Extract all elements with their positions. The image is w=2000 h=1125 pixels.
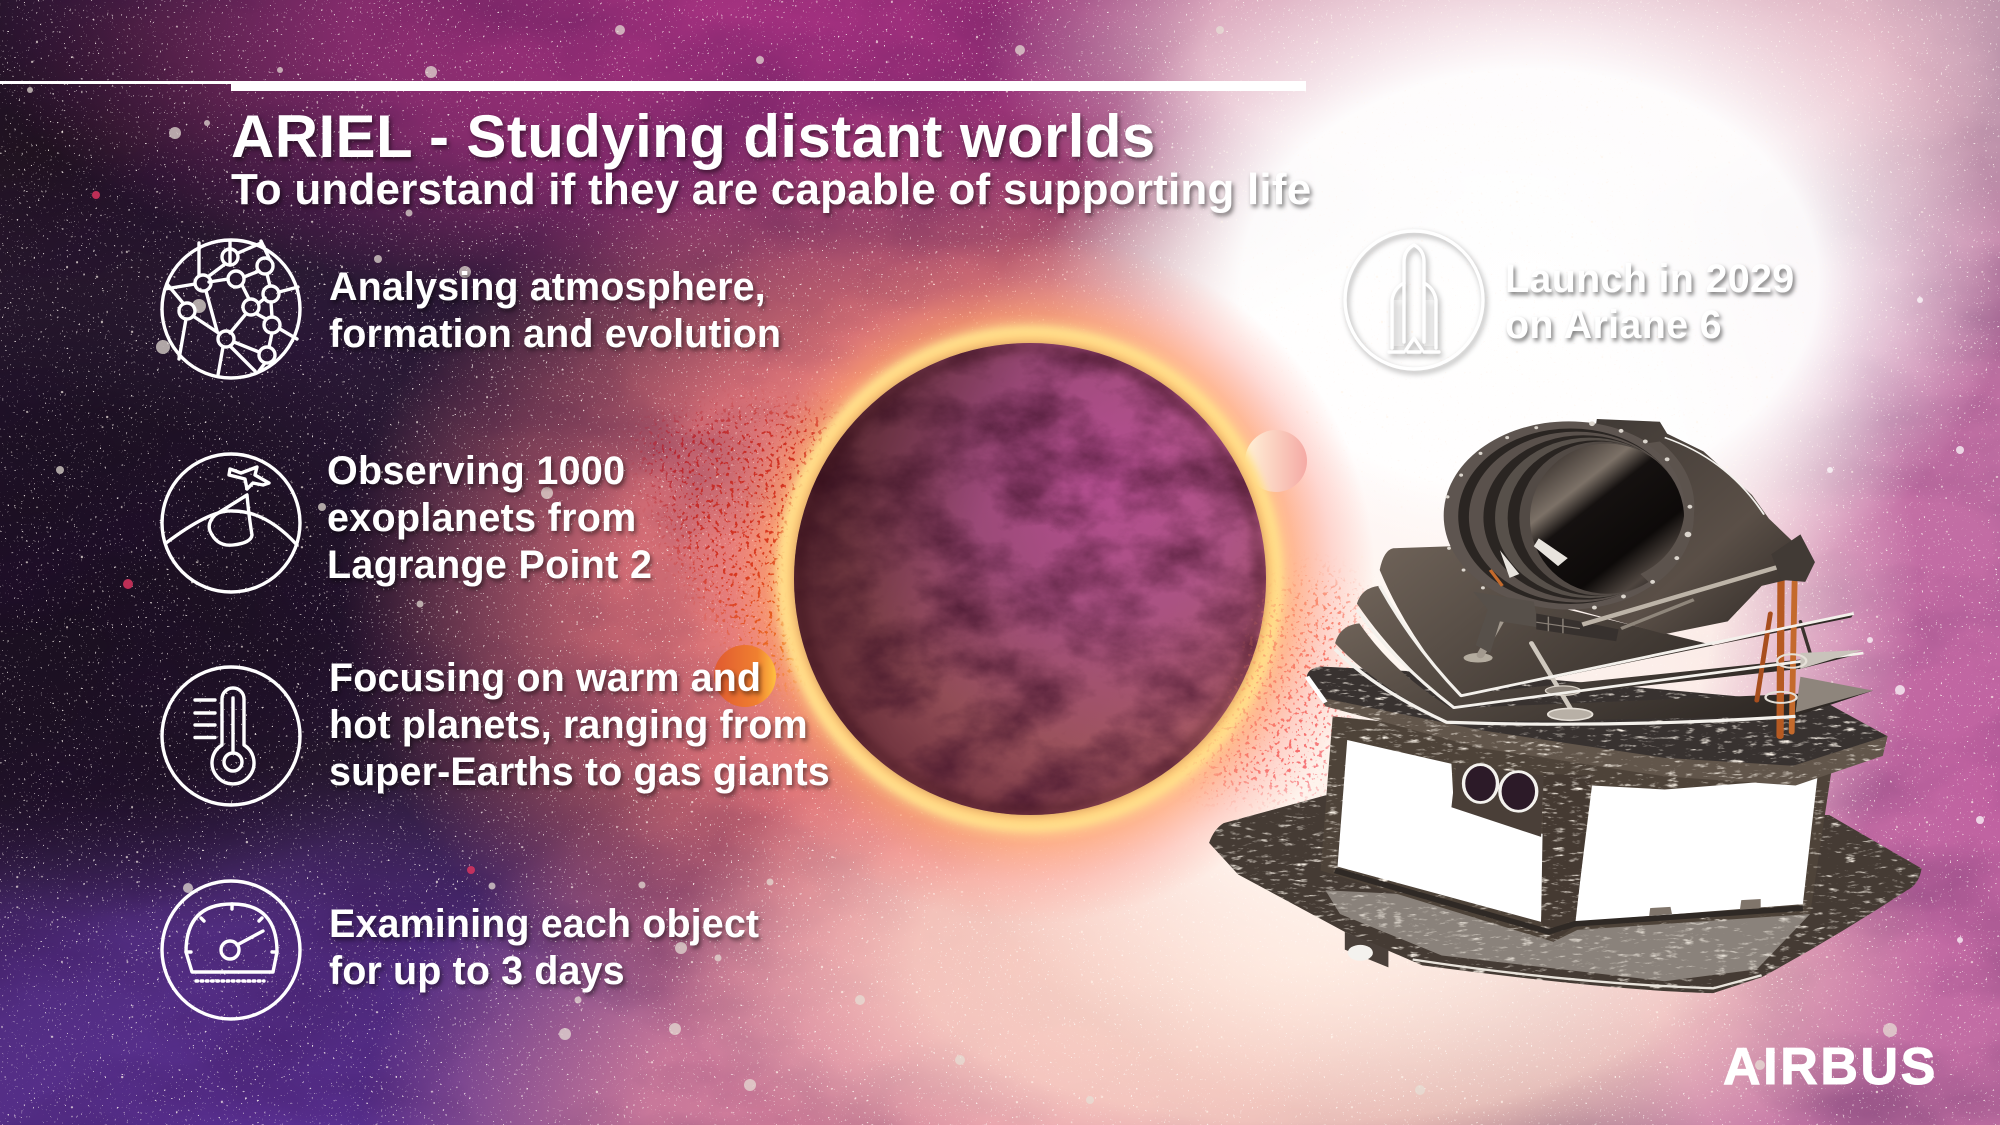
- icon: Ariane 6 rocket: [1342, 228, 1490, 378]
- logo: Airbus: AIRBUS: [1723, 1038, 1938, 1096]
- particle cloud left of planet: [640, 409, 830, 690]
- text: launch: Launch in 2029: [1505, 257, 1795, 301]
- harness and struts: [1464, 578, 1810, 736]
- text: atmosphere: Analysing atmosphere,: [329, 265, 766, 309]
- subtitle: To understand if they are capable of supporting life: [231, 165, 1311, 214]
- telescope baffle rings: [1444, 421, 1764, 610]
- text: warm and hot planets: Focusing on warm and: [329, 656, 761, 700]
- header rule: thick line: [231, 81, 1306, 91]
- V-groove shields: [1335, 546, 1873, 722]
- text: observing: [327, 449, 655, 592]
- text: observing: exoplanets from: [327, 496, 637, 540]
- title: ARIEL - Studying distant worlds: [231, 103, 1156, 170]
- telescope barrel: [1568, 419, 1810, 634]
- body frame: [1321, 716, 1832, 942]
- icon: Lagrange point orbit: [160, 452, 302, 594]
- star tracker lenses: [1464, 765, 1537, 811]
- icon: speedometer: [160, 879, 302, 1021]
- icon: planet atmosphere network: [160, 238, 302, 380]
- text: warm and hot planets: hot planets, ranging from: [329, 703, 808, 747]
- text: examining: for up to 3 days: [329, 949, 625, 993]
- telescope mounts and bipods: [1473, 534, 1815, 653]
- text: atmosphere: [329, 265, 784, 356]
- text: atmosphere: formation and evolution: [329, 312, 781, 356]
- upper platform: [1307, 666, 1888, 786]
- planet halo: [685, 234, 1375, 924]
- text: warm and hot planets: super-Earths to gas giants: [329, 750, 830, 794]
- shield bright edges: [1335, 586, 1873, 724]
- header rule: thin line: [0, 81, 232, 84]
- planet with glowing ring: [778, 327, 1282, 831]
- text: launch: [1505, 257, 1798, 347]
- text: warm and hot planets: [329, 656, 833, 800]
- text: examining: Examining each object: [329, 902, 759, 946]
- text: observing: Observing 1000: [327, 449, 625, 493]
- spacecraft: ARIEL telescope: [1209, 419, 1922, 993]
- particle cloud right of planet: [1195, 570, 1360, 790]
- text: examining: [329, 902, 763, 998]
- pink moon: [1245, 430, 1307, 492]
- icon: thermometer: [160, 665, 302, 807]
- text: launch: on Ariane 6: [1505, 303, 1722, 347]
- orange moon: [714, 645, 776, 707]
- text: observing: Lagrange Point 2: [327, 543, 652, 587]
- lower sunshield base plate: [1209, 795, 1922, 993]
